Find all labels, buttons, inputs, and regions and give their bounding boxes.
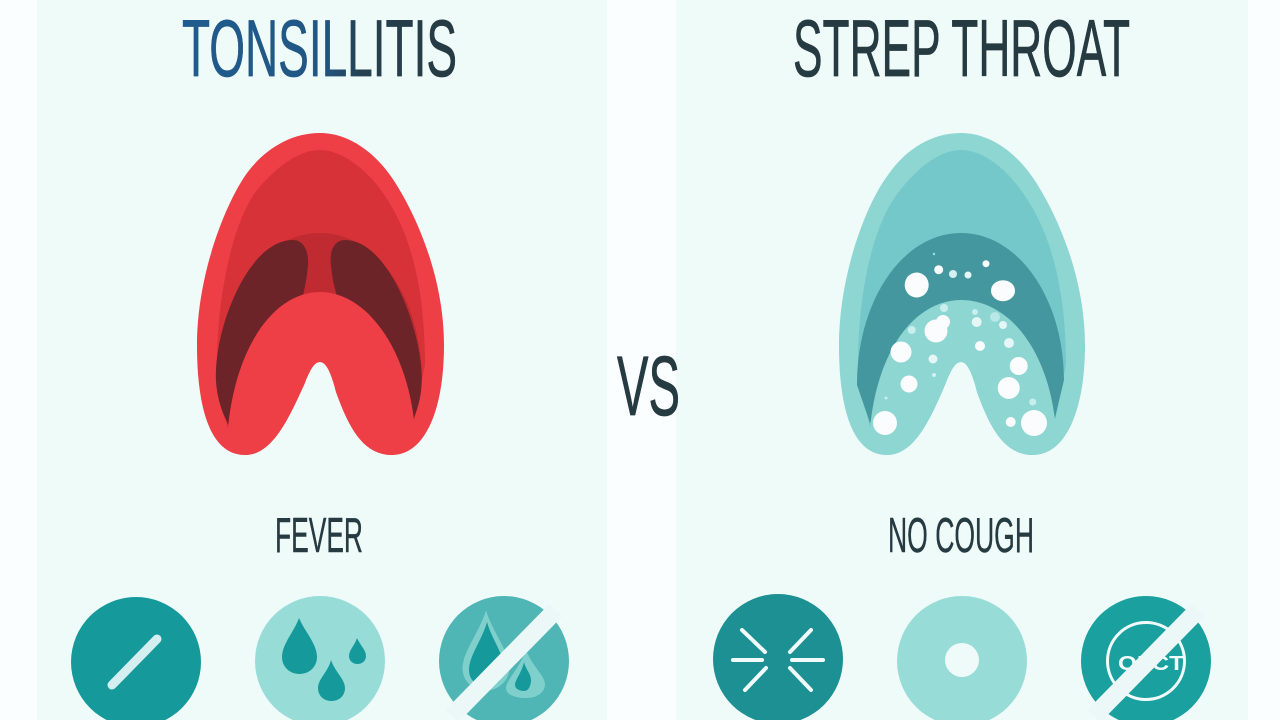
white spots [873, 253, 1047, 436]
icon: crossed-out cough: OLCT [1118, 653, 1184, 675]
panel: tonsillitis [37, 0, 607, 720]
panel: strep throat [676, 0, 1248, 720]
icon: radiating pain lines [713, 594, 843, 720]
icon: crossed-out cough [1081, 596, 1211, 720]
tongue [870, 300, 1055, 455]
illustration: throat with white spots [839, 133, 1085, 455]
label: vs: VS [617, 339, 680, 433]
tongue [228, 292, 414, 455]
right tonsil [331, 240, 422, 420]
icon: water drops [255, 596, 385, 720]
icon: ring with white centre [897, 596, 1027, 720]
left tonsil [216, 240, 308, 424]
illustration: inflamed red throat [197, 133, 444, 455]
icon: thermometer line [71, 597, 201, 720]
title: tonsillitis: TONSILLITIS [182, 4, 457, 94]
icon: crossed-out drops [439, 596, 569, 720]
label: no cough: NO COUGH [888, 509, 1034, 563]
label: fever: FEVER [275, 509, 363, 563]
